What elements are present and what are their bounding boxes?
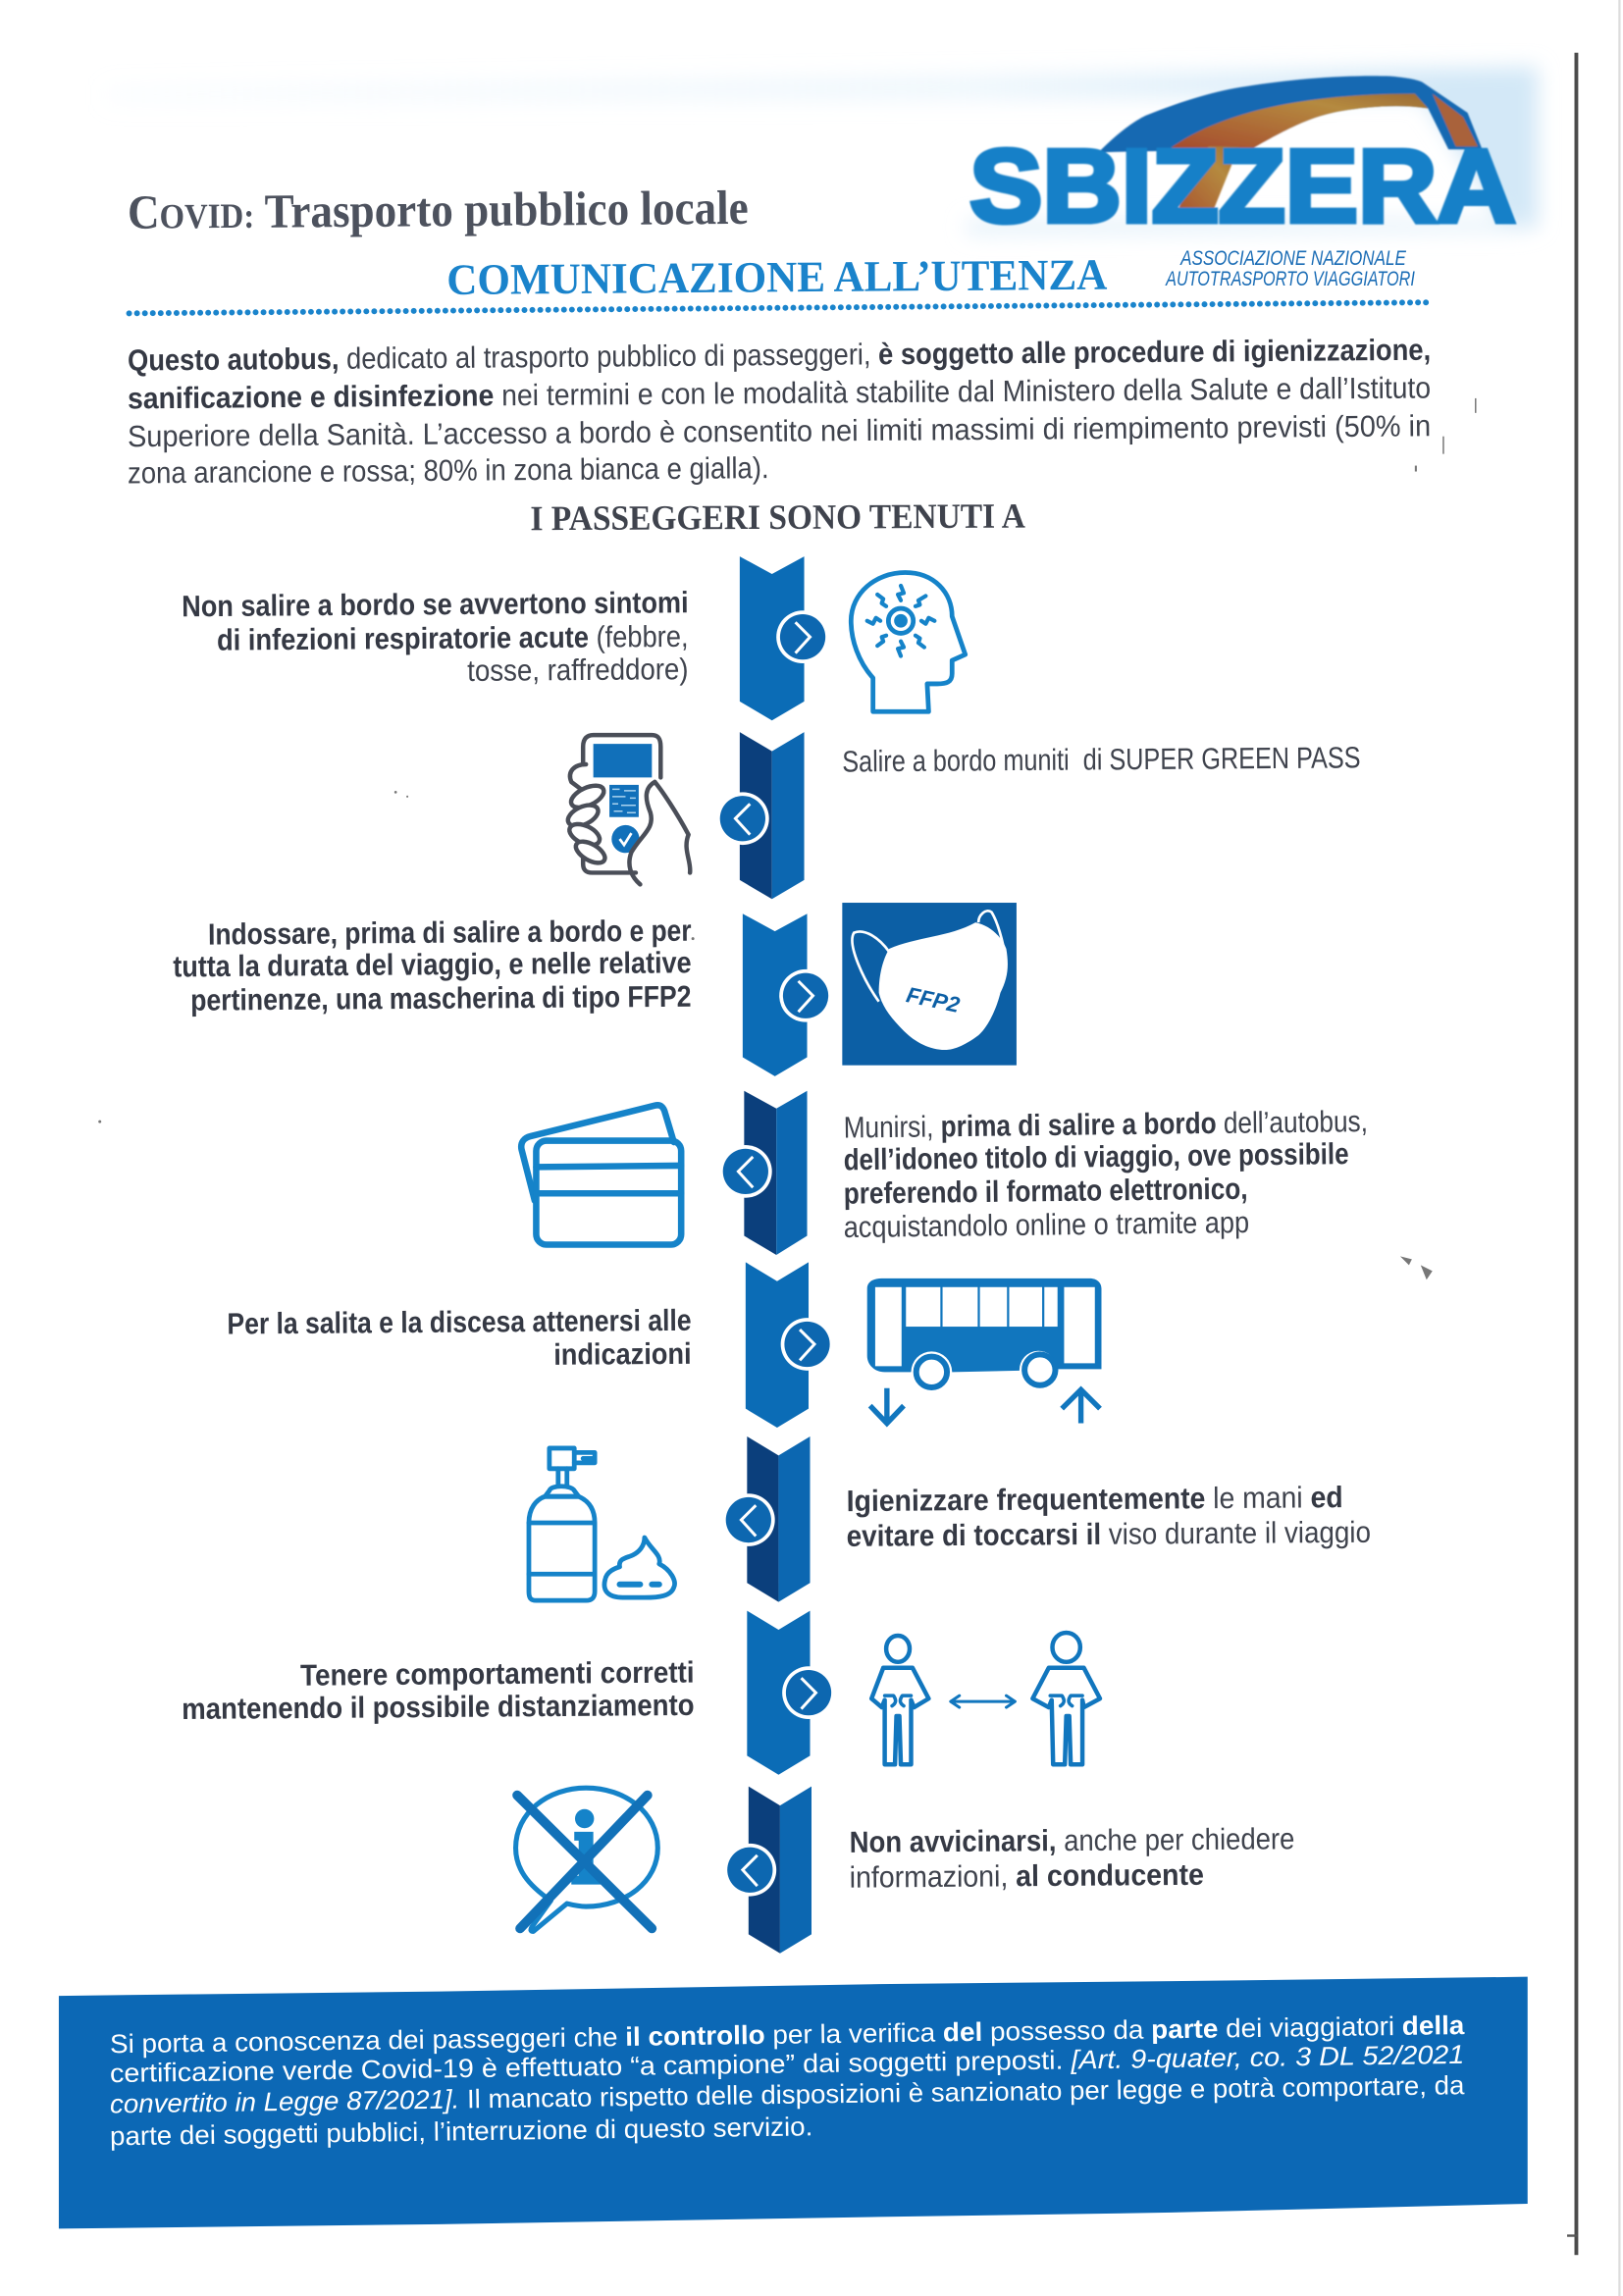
step 4 text: dell’idoneo titolo di viaggio, ove possibile [844,1137,1349,1176]
bottom notice panel: Si porta a conoscenza dei passeggeri che il controllo per la verifica del possesso da parte dei viaggiatori della [110,2010,1466,2059]
scan specks [98,398,1477,1279]
icon: head with headache [851,573,966,711]
step 6 text: Igienizzare frequentemente le mani ed [847,1481,1343,1518]
step 1 text [182,586,689,688]
step 3 text: Indossare, prima di salire a bordo e per [208,914,692,952]
bottom notice panel: convertito in Legge 87/2021]. Il mancato rispetto delle disposizioni è sanzionato per legge e potrà comportare, da [110,2070,1465,2118]
step 8 spine [723,1787,812,1954]
icon: phone with green pass [565,735,690,884]
step 8 text: Non avvicinarsi, anche per chiedere [850,1822,1295,1859]
step 4 spine [719,1091,808,1255]
step 5 text: indicazioni [553,1337,692,1372]
section heading: I PASSEGGERI SONO TENUTI A [530,496,1025,538]
bottom notice panel: certificazione verde Covid-19 è effettuato “a campione” dai soggetti preposti. [Art. 9-quater, co. 3 DL 52/2021 [110,2040,1465,2088]
step 5 spine [746,1262,833,1428]
step 6 spine [722,1436,811,1602]
step 6 text [847,1481,1371,1553]
icon: FFP2 mask: FFP2 [904,982,963,1018]
step 3 text [173,914,692,1018]
logo: SBIZZERA: SBIZZERA [969,129,1516,244]
association name: AUTOTRASPORTO VIAGGIATORI [1165,268,1415,290]
scan border line on the right [1567,0,1621,2296]
step 7 text: Tenere comportamenti corretti [300,1656,695,1693]
icon: two people keeping distance [871,1633,1100,1764]
step 7 spine [747,1611,835,1775]
intro paragraph: Questo autobus, dedicato al trasporto pubblico di passeggeri, è soggetto alle procedure di igienizzazione, [128,334,1431,378]
logo: SBIZZERA [969,76,1516,244]
bottom notice panel: parte dei soggetti pubblici, l’interruzione di questo servizio. [110,2112,813,2151]
intro paragraph [128,334,1431,490]
step 1 text: Non salire a bordo se avvertono sintomi [182,586,689,623]
icon: travel tickets [521,1105,681,1244]
step 6 text: evitare di toccarsi il viso durante il viaggio [847,1516,1371,1553]
step 8 text [850,1822,1295,1895]
step 7 text: mantenendo il possibile distanziamento [182,1689,695,1726]
step 1 text: tosse, raffreddore) [467,652,689,688]
icon: no information to driver [516,1788,657,1931]
association name [1165,247,1415,290]
logo haze background [106,68,1538,235]
step 4 text: acquistandolo online o tramite app [844,1206,1249,1244]
icon: FFP2 mask [842,903,1017,1066]
subtitle: COMUNICAZIONE ALL’UTENZA [446,250,1108,304]
intro paragraph: sanificazione e disinfezione nei termini e con le modalità stabilite dal Ministero della Salute e dall’Istituto [128,371,1431,415]
step 1 spine [740,556,829,720]
step 7 text [182,1656,695,1726]
step 5 text: Per la salita e la discesa attenersi alle [227,1304,692,1341]
step 4 text: Munirsi, prima di salire a bordo dell’autobus, [844,1105,1368,1145]
intro paragraph: Superiore della Sanità. L’accesso a bordo è consentito nei limiti massimi di riempimento previsti (50% in [128,409,1431,453]
association name: ASSOCIAZIONE NAZIONALE [1178,247,1407,270]
icon: bus with arrows [867,1278,1101,1424]
step 3 text: pertinenze, una mascherina di tipo FFP2 [190,980,692,1018]
title: COVID: Trasporto pubblico locale [128,181,749,239]
icon: sanitizer spray and foam [529,1448,674,1600]
step 8 text: informazioni, al conducente [850,1858,1204,1895]
step 2 spine [716,732,805,899]
step 4 text: preferendo il formato elettronico, [844,1173,1248,1211]
step 3 text: tutta la durata del viaggio, e nelle relative [173,946,692,983]
step 3 spine [743,913,832,1076]
bottom notice panel [59,1977,1528,2228]
step 4 text [844,1105,1368,1244]
step 2 text: Salire a bordo muniti di SUPER GREEN PASS [842,741,1361,778]
step 5 text [227,1304,692,1372]
step 1 text: di infezioni respiratorie acute (febbre, [217,620,689,657]
intro paragraph: zona arancione e rossa; 80% in zona bianca e gialla). [128,451,769,490]
